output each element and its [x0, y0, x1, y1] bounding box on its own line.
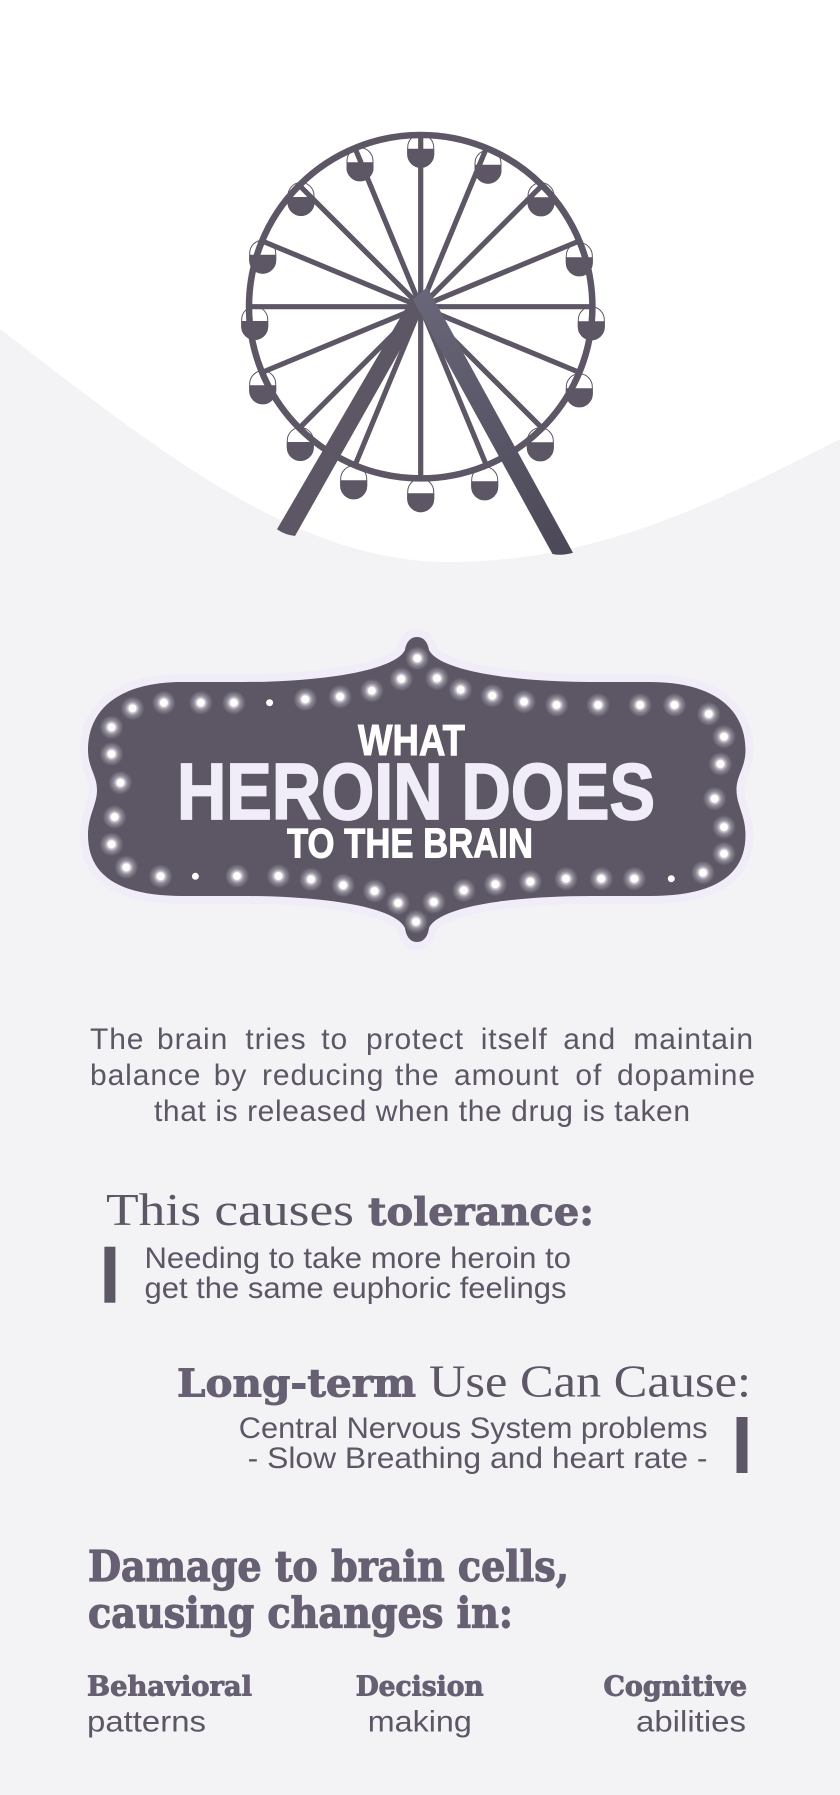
- ferris wheel cabins: [242, 134, 604, 512]
- text block: long-term description: [239, 1412, 708, 1475]
- heading: damage to brain cells: Damage to brain cells,: [88, 1542, 569, 1591]
- bar: long-term: [736, 1417, 748, 1473]
- text block: long-term description: - Slow Breathing and heart rate -: [248, 1442, 707, 1475]
- white curved top area: [0, 0, 840, 562]
- column: cognitive abilities: [604, 1672, 747, 1739]
- sign body: [88, 637, 746, 942]
- heading: long-term use: Use Can Cause:: [429, 1357, 751, 1407]
- column: decision making: [356, 1672, 484, 1739]
- panel: marquee sign: [88, 637, 746, 942]
- text block: intro paragraph: The: [90, 1023, 144, 1056]
- text block: intro paragraph: that is released when the drug is taken: [154, 1095, 690, 1128]
- ferris wheel left leg: [277, 306, 421, 536]
- text block: intro paragraph: and: [563, 1023, 616, 1056]
- ferris wheel right leg: [413, 287, 573, 555]
- column: decision making: Decision: [356, 1672, 484, 1703]
- heading: damage to brain cells: causing changes in:: [88, 1589, 513, 1638]
- heading: damage to brain cells: [88, 1542, 569, 1638]
- text block: intro paragraph: balance: [90, 1059, 201, 1092]
- text block: intro paragraph: of: [575, 1059, 602, 1092]
- text block: intro paragraph: maintain: [633, 1023, 754, 1056]
- heading: long-term use: [177, 1357, 751, 1407]
- column: decision making: making: [368, 1706, 472, 1739]
- text block: intro paragraph: reducing: [262, 1059, 384, 1092]
- text block: tolerance description: get the same euphoric feelings: [144, 1272, 566, 1305]
- text block: intro paragraph: tries: [245, 1023, 307, 1056]
- text block: intro paragraph: amount: [454, 1059, 559, 1092]
- icon: ferris wheel: [242, 134, 604, 555]
- column: cognitive abilities: abilities: [636, 1706, 746, 1739]
- text block: tolerance description: [144, 1242, 571, 1305]
- heading: tolerance: [106, 1185, 594, 1235]
- title: [177, 716, 655, 866]
- text block: tolerance description: Needing to take more heroin to: [144, 1242, 571, 1275]
- title: WHAT: [358, 716, 465, 765]
- ferris wheel ring and spokes: [249, 135, 592, 478]
- text block: long-term description: Central Nervous System problems: [239, 1412, 708, 1445]
- title: TO THE BRAIN: [287, 820, 533, 866]
- text block: intro paragraph: dopamine: [617, 1059, 756, 1092]
- text block: intro paragraph: by: [214, 1059, 247, 1092]
- bar: tolerance: [104, 1247, 115, 1303]
- title: HEROIN DOES: [177, 747, 655, 836]
- heading: long-term use: Long-term: [177, 1361, 416, 1406]
- text block: intro paragraph: to: [321, 1023, 348, 1056]
- heading: tolerance: tolerance:: [368, 1189, 594, 1234]
- column: cognitive abilities: Cognitive: [604, 1672, 747, 1703]
- column: behavioral patterns: Behavioral: [87, 1672, 252, 1703]
- text block: intro paragraph: brain: [157, 1023, 228, 1056]
- sign lights: [100, 646, 736, 934]
- heading: tolerance: This causes: [106, 1185, 354, 1235]
- column: behavioral patterns: [87, 1672, 252, 1739]
- text block: intro paragraph: the: [395, 1059, 439, 1092]
- text block: intro paragraph: itself: [481, 1023, 548, 1056]
- text block: intro paragraph: protect: [366, 1023, 464, 1056]
- text block: intro paragraph: [90, 1023, 756, 1128]
- column: behavioral patterns: patterns: [87, 1706, 206, 1739]
